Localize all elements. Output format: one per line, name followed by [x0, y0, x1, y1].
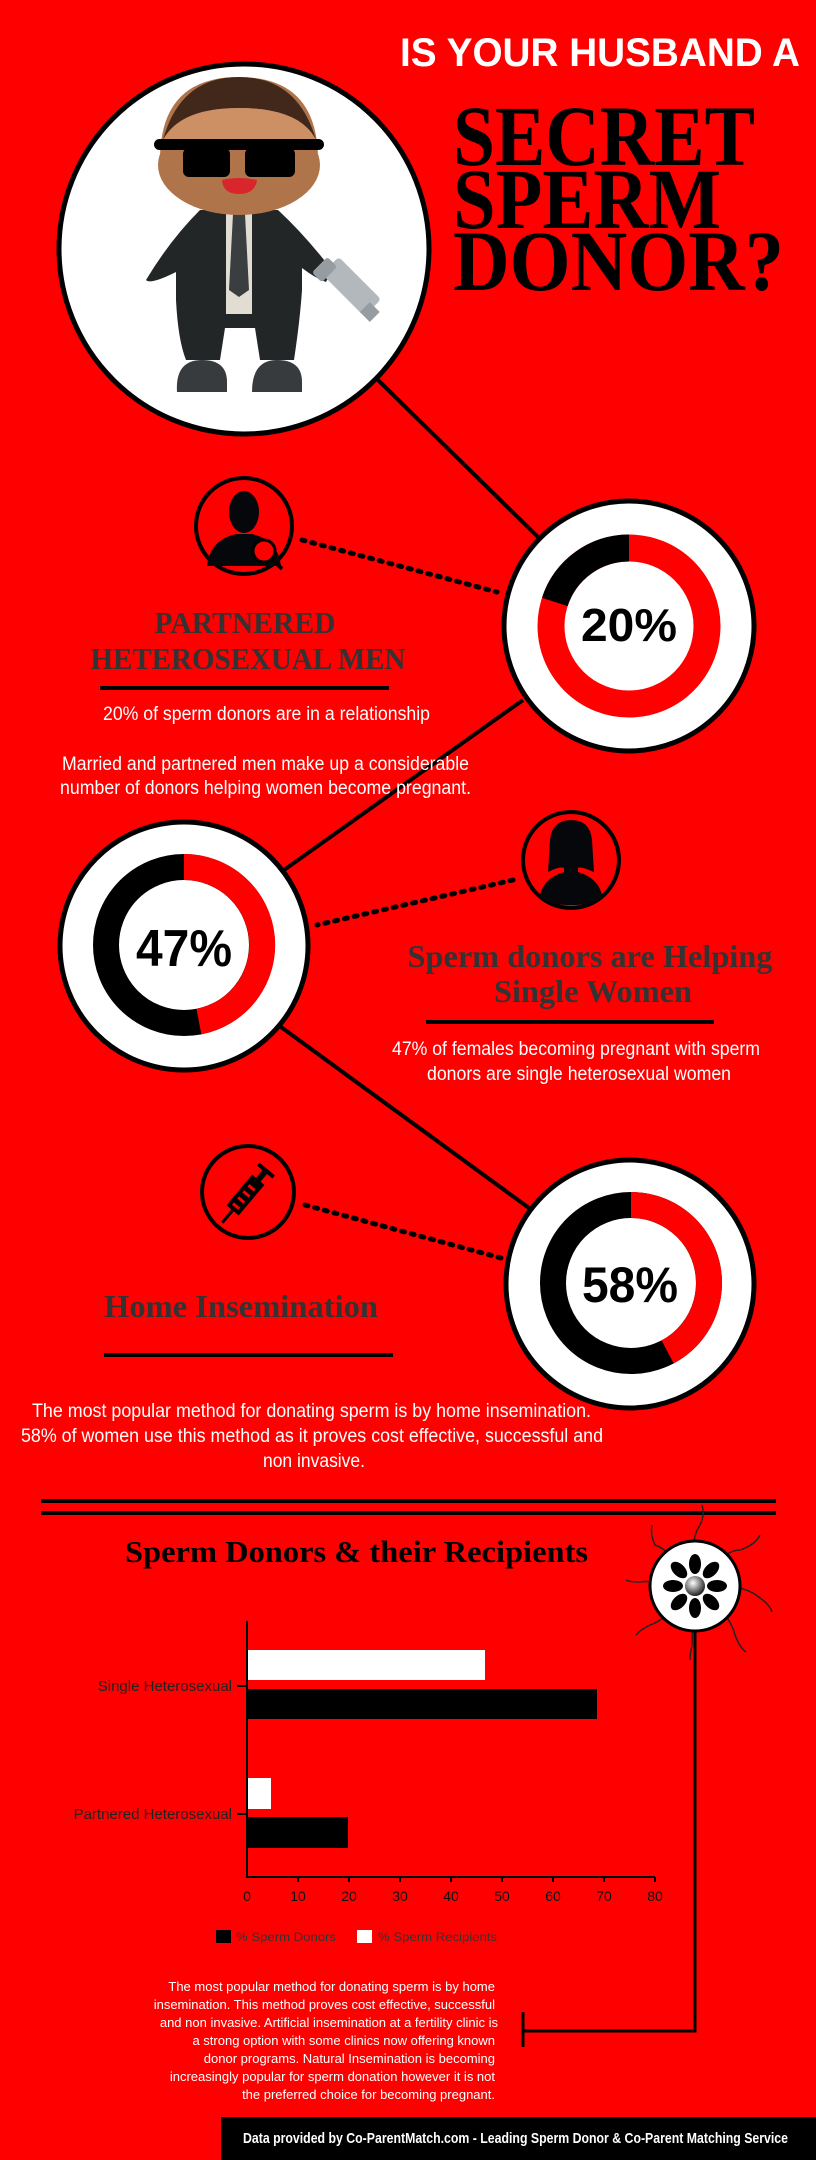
head — [158, 115, 320, 215]
heading: partnered heterosexual men — [90, 605, 406, 690]
text block: chart description: insemination. This method proves cost effective, successful — [154, 1997, 495, 2012]
text block: chart description: increasingly popular for sperm donation however it is not — [170, 2069, 495, 2084]
heading: home insemination: Home Insemination — [104, 1288, 378, 1324]
text block: partnered: Married and partnered men make up a considerable — [62, 754, 469, 775]
text block: home insemination: non invasive. — [263, 1451, 365, 1472]
text block: chart description: donor programs. Natural Insemination is becoming — [204, 2051, 495, 2066]
dotted connector 2 — [317, 880, 513, 925]
gun — [312, 251, 387, 326]
bar chart: 40 — [443, 1888, 459, 1904]
text block: home insemination: The most popular method for donating sperm is by home insemination. — [32, 1401, 591, 1422]
text block: home insemination — [21, 1401, 603, 1472]
footer — [221, 2117, 816, 2160]
text block: chart description: the preferred choice for becoming pregnant. — [242, 2087, 495, 2102]
text block: partnered: number of donors helping women become pregnant. — [60, 778, 471, 799]
bar chart: 20 — [341, 1888, 357, 1904]
text block: chart description — [154, 1979, 498, 2102]
bar chart: 10 — [290, 1888, 306, 1904]
text block: single women: 47% of females becoming pregnant with sperm — [392, 1039, 760, 1060]
title: IS YOUR HUSBAND A — [400, 31, 800, 75]
heading: home insemination — [104, 1288, 393, 1357]
donut chart: 20%: 20% — [581, 599, 677, 651]
icon: sperm around egg — [626, 1505, 772, 1660]
bracket connector — [523, 1631, 695, 2047]
text block: chart description: The most popular method for donating sperm is by home — [168, 1979, 495, 1994]
bar chart: 70 — [596, 1888, 612, 1904]
heading: partnered heterosexual men: PARTNERED — [154, 605, 336, 640]
connector lines — [281, 380, 539, 1208]
text block: home insemination: 58% of women use this method as it proves cost effective, successful and — [21, 1426, 603, 1447]
text block: chart description: a strong option with some clinics now offering known — [192, 2033, 495, 2048]
donut chart: 20% — [504, 501, 754, 751]
donut chart: 47%: 47% — [136, 920, 232, 978]
bar chart: 80 — [647, 1888, 663, 1904]
icon: person with magnifier — [196, 478, 292, 574]
heading: single women: Sperm donors are Helping — [408, 938, 772, 974]
icon: syringe — [202, 1146, 294, 1238]
text block: partnered: 20% of sperm donors are in a relationship — [103, 704, 430, 725]
text block: single women — [392, 1039, 760, 1085]
bar chart: 60 — [545, 1888, 561, 1904]
legend: % Sperm Donors — [236, 1930, 336, 1944]
text block: partnered — [60, 704, 471, 799]
heading: partnered heterosexual men: HETEROSEXUAL MEN — [90, 641, 406, 676]
bar chart: 30 — [392, 1888, 408, 1904]
title: SECRET — [453, 88, 755, 184]
title — [400, 31, 800, 309]
title: SPERM — [453, 151, 721, 247]
heading: single women — [408, 938, 772, 1024]
icon: woman — [523, 812, 619, 908]
legend: % Sperm Recipients — [378, 1930, 497, 1944]
bar chart — [74, 1621, 663, 1904]
text block: single women: donors are single heterosexual women — [427, 1064, 731, 1085]
shoes — [177, 360, 227, 392]
donut chart: 58%: 58% — [582, 1257, 678, 1313]
bar chart: 50 — [494, 1888, 510, 1904]
dotted connector 1 — [302, 540, 497, 592]
arms/suit — [146, 210, 332, 360]
text block: chart description: and non invasive. Artificial insemination at a fertility clinic is — [160, 2015, 498, 2030]
bar chart: Single Heterosexual — [98, 1678, 232, 1695]
donut chart: 47% — [60, 822, 308, 1070]
title: DONOR? — [453, 213, 784, 309]
bar chart: Partnered Heterosexual — [74, 1806, 232, 1823]
donut chart: 58% — [506, 1160, 754, 1408]
bar chart: 0 — [243, 1888, 251, 1904]
legend — [216, 1930, 497, 1944]
illustration: secret agent man — [59, 64, 429, 434]
dotted connector 3 — [305, 1205, 501, 1258]
heading: single women: Single Women — [494, 973, 692, 1009]
chart heading: Sperm Donors & their Recipients — [125, 1534, 588, 1569]
